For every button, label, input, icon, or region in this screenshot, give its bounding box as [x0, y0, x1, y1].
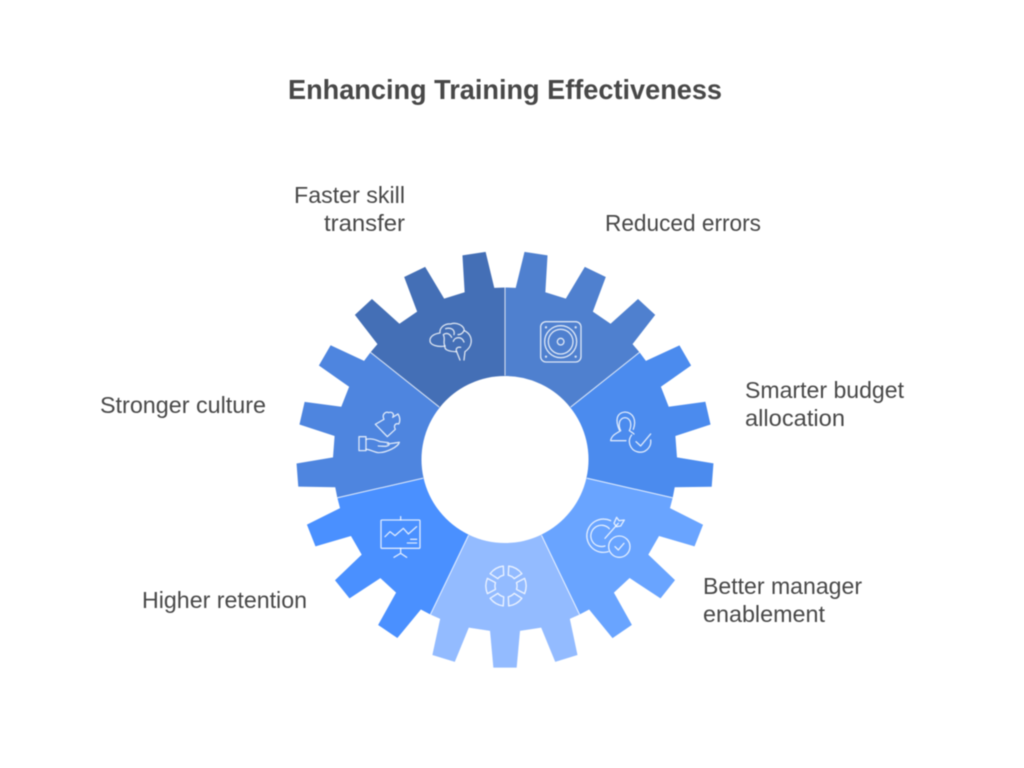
icon: presentation chart [381, 517, 420, 557]
segment: smarter budget allocation [546, 330, 761, 544]
icon: brain [430, 323, 471, 360]
label: faster skill transfer [294, 182, 405, 236]
label: better manager enablement: Better manager [703, 573, 862, 599]
label: stronger culture: Stronger culture [100, 392, 266, 418]
label: smarter budget allocation [745, 377, 905, 431]
gear diagram [269, 213, 761, 712]
icon: speaker [541, 322, 581, 362]
icon: user with check [611, 412, 651, 452]
segment: bottom [392, 506, 595, 712]
segment: stronger culture [269, 325, 454, 506]
icon: hand with puzzle piece [359, 412, 400, 453]
label: smarter budget allocation: allocation [745, 405, 845, 431]
icon: segmented ring [486, 565, 526, 607]
icon: target with check [587, 517, 630, 557]
segment: faster skill transfer [343, 213, 558, 427]
label: better manager enablement: enablement [703, 601, 826, 627]
label: faster skill transfer: transfer [324, 210, 405, 236]
segment: higher retention [280, 441, 482, 647]
title: Enhancing Training Effectiveness [288, 74, 722, 105]
label: reduced errors: Reduced errors [605, 210, 761, 236]
segment: better manager enablement [522, 471, 707, 652]
label: smarter budget allocation: Smarter budget [745, 377, 905, 403]
label: higher retention: Higher retention [142, 587, 307, 613]
label: faster skill transfer: Faster skill [294, 182, 405, 208]
segment: reduced errors [505, 252, 655, 407]
label: better manager enablement [703, 573, 862, 627]
